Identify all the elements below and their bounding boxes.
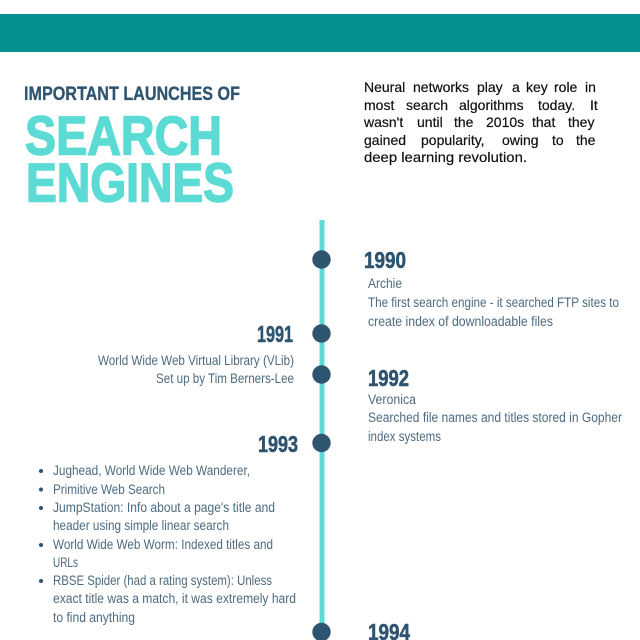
intro paragraph: role [554, 79, 578, 95]
heading: engines: ENGINES [26, 152, 234, 214]
bullet list 1993: JumpStation: Info about a page's title and [53, 500, 275, 515]
intro paragraph: algorithms [459, 97, 524, 113]
description 1992: Veronica [368, 392, 416, 407]
timeline marker 1994 [312, 623, 331, 640]
intro paragraph: popularity, [421, 132, 485, 148]
intro paragraph: a [512, 79, 520, 95]
intro paragraph: to [552, 132, 564, 148]
entry: 1990 [364, 247, 619, 329]
intro paragraph: today. [538, 97, 575, 113]
description 1990: Archie [368, 276, 402, 291]
intro paragraph: in [585, 79, 596, 95]
intro paragraph: owing [502, 132, 539, 148]
intro paragraph: until [417, 114, 443, 130]
year 1992: 1992 [368, 365, 409, 391]
intro paragraph: the [576, 132, 596, 148]
bullet list 1993: URLs [53, 555, 78, 570]
timeline marker 1990 [312, 250, 331, 269]
intro paragraph: the [454, 114, 474, 130]
intro paragraph: key [526, 79, 548, 95]
description 1991: World Wide Web Virtual Library (VLib) [98, 353, 294, 368]
intro paragraph: play [477, 79, 503, 95]
intro paragraph: wasn't [363, 114, 403, 130]
heading: search: SEARCH [25, 104, 222, 166]
bullet list 1993: exact title was a match, it was extremely hard [53, 591, 296, 606]
description 1992: index systems [368, 429, 441, 444]
intro paragraph: Neural [364, 79, 405, 95]
bullet list 1993: to find anything [53, 610, 135, 625]
timeline marker 1993 [312, 434, 331, 452]
bullet list 1993: Primitive Web Search [53, 482, 165, 497]
year 1993: 1993 [258, 431, 298, 457]
timeline marker 1991 [312, 324, 331, 343]
intro paragraph: It [590, 97, 598, 113]
entry: 1993 [39, 431, 298, 625]
intro paragraph: they [568, 114, 594, 130]
year 1991: 1991 [257, 321, 293, 347]
description 1991: Set up by Tim Berners-Lee [156, 371, 294, 386]
heading: important launches of: IMPORTANT LAUNCHES OF [24, 84, 240, 105]
intro paragraph: networks [413, 79, 469, 95]
intro paragraph: gained [364, 132, 406, 148]
intro paragraph: deep learning revolution. [364, 149, 527, 165]
description 1990: create index of downloadable files [368, 314, 553, 329]
top banner [0, 14, 640, 52]
entry: 1992 [368, 365, 622, 444]
intro paragraph: that [532, 114, 555, 130]
title block [24, 84, 240, 214]
bullet list 1993: RBSE Spider (had a rating system): Unless [53, 573, 272, 588]
bullet list 1993: World Wide Web Worm: Indexed titles and [53, 537, 273, 552]
timeline axis [320, 220, 324, 640]
year 1990: 1990 [364, 247, 406, 273]
intro paragraph: 2010s [486, 114, 524, 130]
timeline marker 1992 [312, 365, 331, 384]
intro paragraph: most [364, 97, 394, 113]
bullet list 1993: Jughead, World Wide Web Wanderer, [53, 463, 250, 478]
entry: 1991 [98, 321, 294, 386]
intro paragraph: search [406, 97, 448, 113]
bullet markers [39, 469, 43, 583]
bullet list 1993: header using simple linear search [53, 518, 229, 533]
